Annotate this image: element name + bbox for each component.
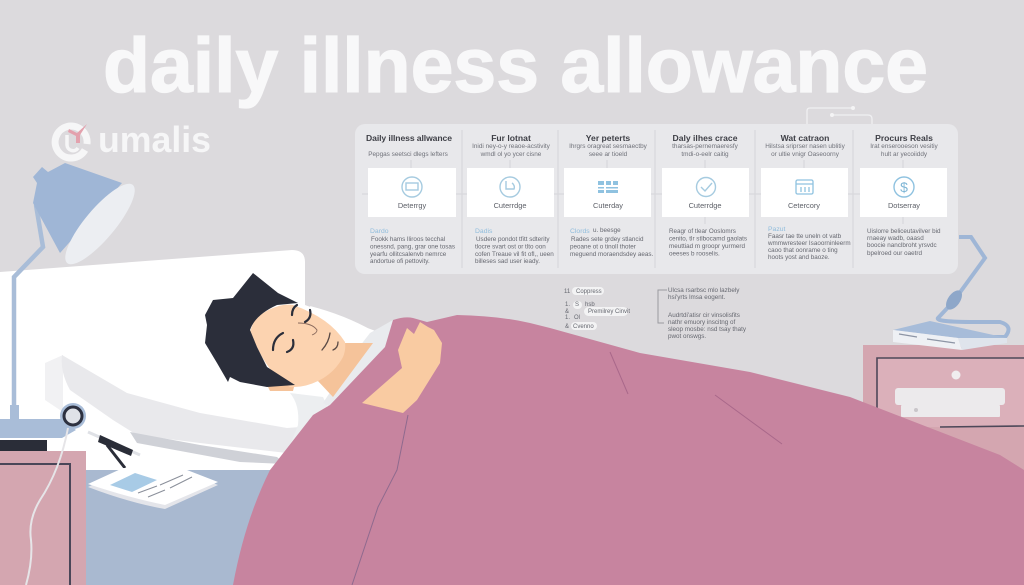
column 2: Usdere pondot tfitt sdterity [476,236,550,243]
column 1: yearfu ollitcsalenvb nemrce [370,251,447,258]
column 2: Fur lotnat [491,133,531,143]
column 5: Pazut [768,226,785,233]
column 4: Reagr of tlear Ooslomrs [669,228,736,235]
callout: notes: nathr emuory inscitng of [668,319,735,326]
column 5: or ultie vnigr Oaseoorny [771,151,840,158]
column 3: Clords [570,228,590,235]
column 3: u. beesge [593,227,621,234]
face [250,305,345,387]
column 3: Yer peterts [586,133,630,143]
column 3: peoane ot o tinoll thoter [570,244,636,250]
callout: legend list [564,287,630,330]
column 2 [467,133,554,265]
column 6: Procurs Reals [875,133,933,143]
column 4 [662,133,749,258]
blanket [233,315,1024,585]
column 1: Pepgas seetsci dlegs lefters [368,151,448,158]
floor [85,470,325,585]
nightstand: right [863,345,1024,585]
callout: notes: hsi'yrts lmsa eogent. [668,294,725,301]
column 5 [761,133,851,261]
column 3: Rades sete grdey stlancid [571,236,644,243]
panel: process table [355,124,958,274]
callout: legend list: Premilrey Cinvit [588,309,630,315]
callout: notes: sleop mosbe: nsd tsay thaty [668,326,747,333]
nightstand: left [0,419,86,585]
callout: notes: Ulcsa rsarbsc mlo lazbely [668,287,740,294]
booklet [88,468,218,509]
column 2: Dadis [475,228,493,235]
column 5: wmmwresteer Isaoorninleerm [767,240,851,247]
callout: legend list: 1. [565,302,570,308]
column 1: onessnd, pang, grar one tosas [370,244,455,250]
column 1: Dardo [370,228,389,235]
column 6: boocie nanclbroht yrsvdc [867,242,937,249]
callout: legend list: Coppress [576,289,602,295]
column 3: seee ar tioeld [589,151,628,158]
shirt collar [323,320,395,410]
sleeping person [205,273,395,410]
column dividers [362,130,903,268]
device and cable [893,237,1009,350]
column 5: hoots yost and baoze. [768,254,830,261]
callout: notes: Audrtdi'atisr cir vinsolisfits [668,312,740,319]
column 6: Dotserray [888,201,920,210]
column 4: cenito, tlr stlbocamd gaolats [669,236,747,242]
column 4: meuttiad m groopr yurmerd [669,243,745,250]
column 3: Ihrgrs oragreat sesmaectby [569,143,648,150]
bed headboard and mattress [0,250,400,470]
column 5: Wat catraon [781,133,829,143]
column 4: tmdi-o-eelr caitig [681,151,729,158]
callout: legend list: 11 [564,289,571,295]
icon: chart circle [500,177,520,197]
column 3: Cuterday [593,201,623,210]
callout: legend list: Ol [574,315,580,321]
arm and hand [362,322,442,413]
callout: legend list: & [565,309,569,315]
icon: grid [598,181,618,193]
neck and shoulder [317,343,373,397]
callout: legend list: & [565,324,569,330]
column 2: Cuterrdge [494,201,526,210]
callout: legend list: hsb [585,302,595,308]
column 1: Deterrgy [398,201,426,210]
column 1: Fookk hams lliroos tecchal [371,236,445,243]
ear shadow [267,383,295,391]
column 5: Cetercory [788,201,820,210]
column 2: Inidi ney-o-y reaoe-acstivity [472,143,551,150]
callout: legend list: S [575,302,579,308]
column 5: caoo that oonrame o ting [768,247,838,254]
lamp base knob and cord [26,403,86,585]
column 4: tharsas-pernemaeresfy [672,143,739,150]
column 6: bpelroed our oaetrd [867,250,922,257]
column 5: Faasr tae tte uneln ot vatb [768,233,842,240]
title: daily illness allowance [103,23,928,109]
callout: legend list: Cvenno [573,324,594,330]
eyes and mouth [273,305,310,352]
icon: check [696,178,716,196]
column 1: Daily illness allwance [366,133,452,143]
glasses / clip [88,432,140,468]
column 3 [564,133,654,258]
column 5: Hilstsa sriprser nasen ublitiy [765,143,846,150]
callout: legend list: 1. [565,315,570,321]
logo: umalis: umalis [98,119,211,160]
lamp: left desk lamp [10,163,144,419]
column 4: Cuterrdge [689,201,721,210]
column 6: hult ar yecoiiddy [881,151,928,158]
column 2: tlocre svart ost or tlto oon [475,244,546,250]
column 6: Irat enserooeson vesitiy [870,143,939,150]
icon: card [402,177,422,197]
connector lines above panel [807,106,872,125]
column 2: cofen Treaue vil fit ofl,, ueen [475,251,554,258]
column 4: oeeses b rooselis. [669,250,720,258]
icon: dollar: $ [900,179,908,195]
callout: notes [658,287,747,340]
column 3: meguend moraendsdey aeas. [570,251,654,258]
column 4: Daly ilhes crace [673,133,738,143]
column 6: Uislorre beliceutavilver bid [867,228,941,235]
column 2: billeses sad user ieady. [475,258,540,265]
column 1 [366,133,456,265]
column 6 [860,133,947,257]
icon: calendar [796,180,813,194]
column 6: rnaeay wadb, oaasd [867,235,924,242]
pillow [62,306,373,464]
callout: notes: pwot onswgs. [668,333,706,340]
column 1: andortue ofi pettovity. [370,258,430,265]
column 2: wmdl ol yo ycer cisne [480,151,542,158]
hair [205,273,298,387]
